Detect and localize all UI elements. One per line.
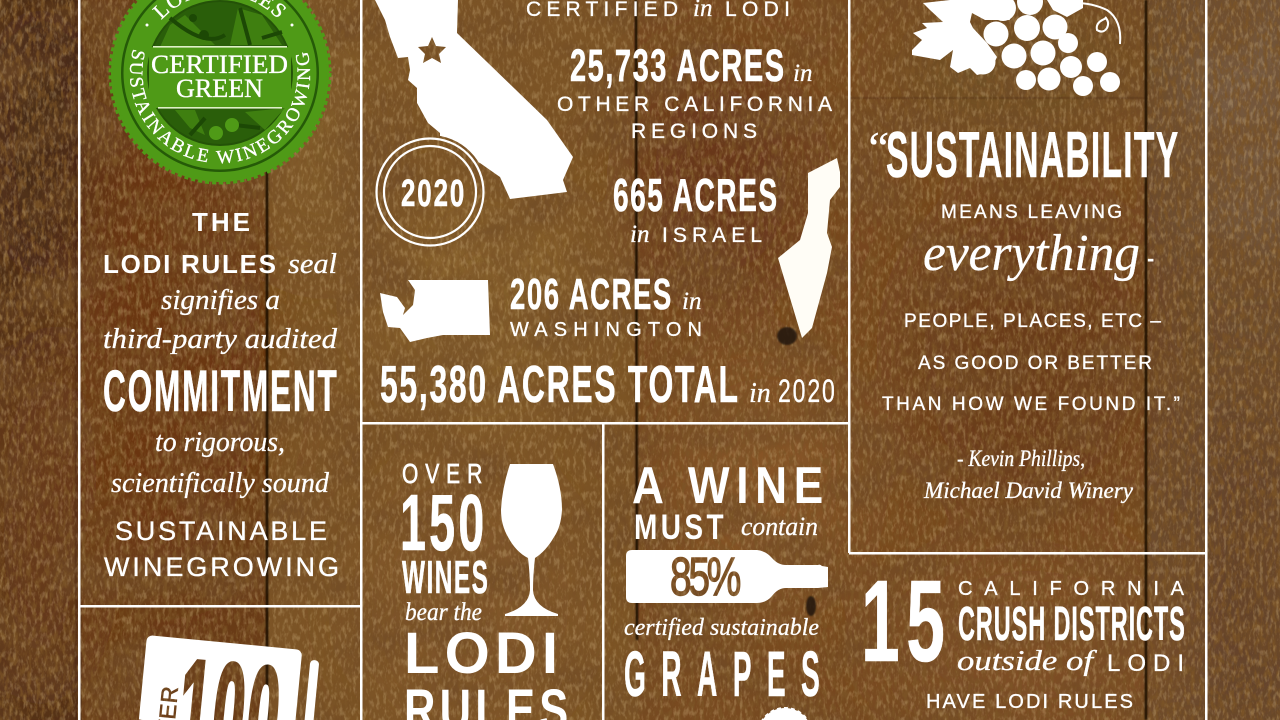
text: seal statement: scientifically sound — [111, 468, 330, 499]
icon: certified green seal — [108, 0, 332, 184]
text: sustainability quote: PEOPLE, PLACES, ETC – — [904, 311, 1161, 332]
text: over 150 wines bear the Lodi Rules: LODI — [404, 621, 558, 686]
text: sustainability quote: SUSTAINABILITY — [886, 118, 1178, 191]
icon: California map — [375, 0, 573, 199]
panel: Lodi Rules seal statement — [103, 0, 339, 582]
text: Washington acres — [510, 269, 702, 341]
icon: Washington map — [380, 280, 490, 342]
panel: over 100 tag — [126, 635, 320, 720]
text: crush districts — [926, 578, 1185, 713]
text: crush districts: CRUSH DISTRICTS — [958, 598, 1185, 651]
text: Washington acres: in — [682, 288, 701, 315]
text: crush districts: CALIFORNIA — [958, 578, 1185, 600]
text: sustainability quote: “ — [864, 122, 890, 173]
text: over 150 wines bear the Lodi Rules: WINES — [402, 552, 488, 603]
text: crush districts: HAVE LODI RULES — [926, 691, 1133, 713]
text: Israel acres: ISRAEL — [662, 224, 762, 247]
text: total acres: 55,380 ACRES TOTAL — [380, 356, 738, 414]
icon: certified green seal: SUSTAINABLE WINEGROWING — [130, 50, 310, 164]
icon: tilted white tag with 100 — [126, 635, 320, 720]
icon: wine glass — [501, 464, 562, 616]
text: seal statement: signifies a — [161, 285, 280, 316]
text: a wine must contain: A WINE — [632, 457, 823, 515]
icon: certified green seal: GREEN — [176, 74, 263, 103]
text: other California regions: in — [793, 60, 812, 87]
icon: 2020 double ring badge — [376, 138, 484, 246]
text: seal statement: COMMITMENT — [103, 359, 337, 423]
panel: sustainability quote — [864, 0, 1180, 503]
text: over 150 wines bear the Lodi Rules: 150 — [400, 478, 484, 567]
number: 15: 15 — [861, 557, 945, 686]
text: seal statement: WINEGROWING — [104, 552, 339, 582]
text: seal statement — [103, 207, 339, 582]
text: sustainability quote: AS GOOD OR BETTER — [918, 353, 1152, 374]
text: Washington acres: WASHINGTON — [510, 319, 702, 341]
panel: wine must contain 85% — [624, 457, 828, 720]
text: Israel acres: in — [630, 221, 649, 248]
text: certified sustainable grapes: certified sustainable — [624, 615, 819, 641]
icon: scalloped seal top — [758, 708, 812, 720]
text: Israel acres — [613, 171, 777, 248]
icon: 2020 double ring badge: 2020 — [401, 172, 464, 214]
text: seal statement: LODI RULES — [103, 249, 276, 279]
text: a wine must contain: contain — [741, 512, 818, 541]
panel: over 150 wines — [400, 459, 568, 720]
text: certified sustainable grapes: GRAPES — [624, 639, 820, 710]
text: a wine must contain: MUST — [634, 507, 724, 547]
text: Israel acres: 665 ACRES — [613, 171, 777, 222]
text: sustainability quote: - — [1147, 246, 1154, 271]
text: crush districts: outside of — [957, 646, 1097, 677]
icon: certified green seal: CERTIFIED — [151, 50, 288, 79]
icon: grape cluster and leaf — [912, 0, 1120, 96]
text: other California regions: 25,733 ACRES — [570, 42, 784, 92]
text: sustainability quote — [864, 118, 1180, 415]
text: attribution: Michael David Winery — [923, 478, 1134, 503]
text: crush districts: LODI — [1107, 650, 1184, 677]
icon: Israel map — [778, 158, 840, 338]
text: over 150 wines bear the Lodi Rules: OVER — [402, 459, 482, 490]
text: over 150 wines bear the Lodi Rules: bear the — [405, 599, 482, 626]
text: total acres: 2020 — [778, 373, 835, 409]
text: Washington acres: 206 ACRES — [510, 269, 671, 319]
text: over 150 wines bear the Lodi Rules — [400, 459, 568, 720]
text: seal statement: seal — [288, 249, 337, 280]
text: total acres: in — [749, 378, 771, 409]
text: seal statement: THE — [192, 207, 250, 237]
text: seal statement: to rigorous, — [155, 427, 285, 458]
text: other California regions — [557, 42, 832, 143]
text: other California regions: REGIONS — [631, 120, 757, 143]
panel: 15 crush districts — [861, 557, 1185, 713]
icon: wine bottle with 85% — [626, 550, 828, 603]
text: attribution: - Kevin Phillips, — [957, 446, 1085, 471]
text: other California regions: OTHER CALIFORNIA — [557, 93, 832, 116]
text: sustainability quote: everything — [923, 225, 1140, 282]
text: a wine must contain — [632, 457, 823, 547]
text: sustainability quote: MEANS LEAVING — [941, 202, 1122, 223]
text: seal statement: third-party audited — [103, 324, 338, 355]
text: sustainability quote: THAN HOW WE FOUND IT.” — [882, 394, 1180, 415]
text: attribution — [923, 446, 1134, 503]
text: seal statement: SUSTAINABLE — [115, 516, 327, 546]
text: certified in Lodi — [526, 0, 790, 22]
panel: certified acres 2020 — [375, 0, 840, 414]
